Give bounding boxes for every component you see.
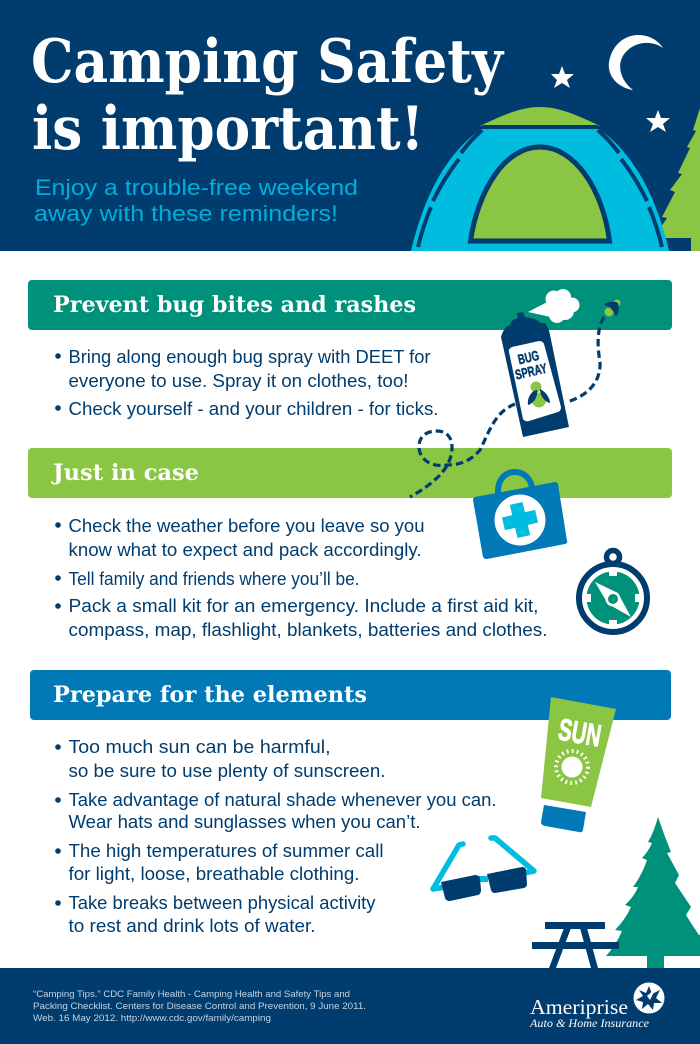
icon: first aid kit <box>473 472 567 559</box>
icon: star right <box>646 110 670 132</box>
citation: “Camping Tips.” CDC Family Health - Camping Health and Safety Tips and <box>33 989 350 999</box>
icon: star left <box>551 66 574 88</box>
citation: Packing Checklist. Centers for Disease Control and Prevention, 9 June 2011. <box>33 1001 366 1011</box>
text block: elements tips: Take breaks between physical activity <box>68 892 376 913</box>
icon: moon <box>609 35 663 90</box>
logo: ameriprise: Auto & Home Insurance <box>529 1016 650 1030</box>
text block: just in case tips: compass, map, flashlight, blankets, batteries and clothes. <box>68 619 548 640</box>
banner: just in case <box>28 448 672 498</box>
icon: bug spray can <box>501 312 569 437</box>
logo: ameriprise: Ameriprise <box>530 995 628 1019</box>
title: Camping Safety <box>31 27 505 97</box>
banner: prepare for the elements <box>30 670 671 720</box>
subtitle <box>34 175 358 226</box>
text block: just in case tips: Tell family and friends where you’ll be. <box>68 568 360 589</box>
icon: header tree <box>652 108 700 251</box>
icon: spray cloud <box>528 289 580 323</box>
subtitle: away with these reminders! <box>34 201 338 226</box>
text block: elements tips <box>55 736 496 936</box>
text block: elements tips: so be sure to use plenty of sunscreen. <box>68 760 385 781</box>
text block: elements tips: to rest and drink lots of water. <box>68 915 316 936</box>
title <box>31 27 505 164</box>
icon: sunscreen tube: SUN <box>556 711 604 754</box>
icon: sunglasses <box>433 838 534 901</box>
text block: elements tips: for light, loose, breathable clothing. <box>68 863 360 884</box>
banner: prevent bug bites <box>28 280 672 330</box>
banner: just in case: Just in case <box>51 460 199 486</box>
icon: pine tree <box>606 817 700 968</box>
text block: elements tips: Too much sun can be harmful, <box>68 736 330 757</box>
text block: bug bites tips: everyone to use. Spray it on clothes, too! <box>68 370 408 391</box>
citation <box>33 989 366 1023</box>
icon: bug spray can: SPRAY <box>513 360 549 383</box>
banner: prevent bug bites: Prevent bug bites and rashes <box>53 292 416 318</box>
header panel <box>0 0 700 251</box>
panel: prevent bug bites <box>28 280 672 419</box>
text block: bug bites tips: Check yourself - and your children - for ticks. <box>68 398 438 419</box>
text block: elements tips: The high temperatures of summer call <box>68 840 384 861</box>
text block: bug bites tips: Bring along enough bug spray with DEET for <box>68 346 430 367</box>
citation: Web. 16 May 2012. http://www.cdc.gov/family/camping <box>33 1013 271 1023</box>
panel: just in case <box>28 448 672 640</box>
icon: bug spray can: BUG <box>516 347 541 368</box>
icon: picnic table <box>532 922 619 968</box>
text block: elements tips: Take advantage of natural shade whenever you can. <box>68 789 496 810</box>
text block: elements tips: Wear hats and sunglasses when you can’t. <box>68 811 420 832</box>
text block: just in case tips: Check the weather before you leave so you <box>68 515 424 536</box>
icon: flight path dashes <box>410 317 604 497</box>
title: is important! <box>32 94 424 164</box>
icon: compass <box>579 550 647 632</box>
banner: prepare for the elements: Prepare for the elements <box>53 682 367 708</box>
panel: prepare for the elements <box>30 670 671 936</box>
icon: sunscreen tube <box>541 697 616 832</box>
text block: just in case tips: Pack a small kit for an emergency. Include a first aid kit, <box>68 595 538 616</box>
footer panel <box>0 968 700 1044</box>
text block: just in case tips: know what to expect and pack accordingly. <box>68 539 422 560</box>
text block: just in case tips <box>55 515 547 640</box>
logo: ameriprise <box>529 982 664 1030</box>
subtitle: Enjoy a trouble-free weekend <box>35 175 358 200</box>
text block: bug bites tips <box>55 346 438 419</box>
icon: flying bug <box>604 300 620 317</box>
icon: tent <box>411 107 669 251</box>
